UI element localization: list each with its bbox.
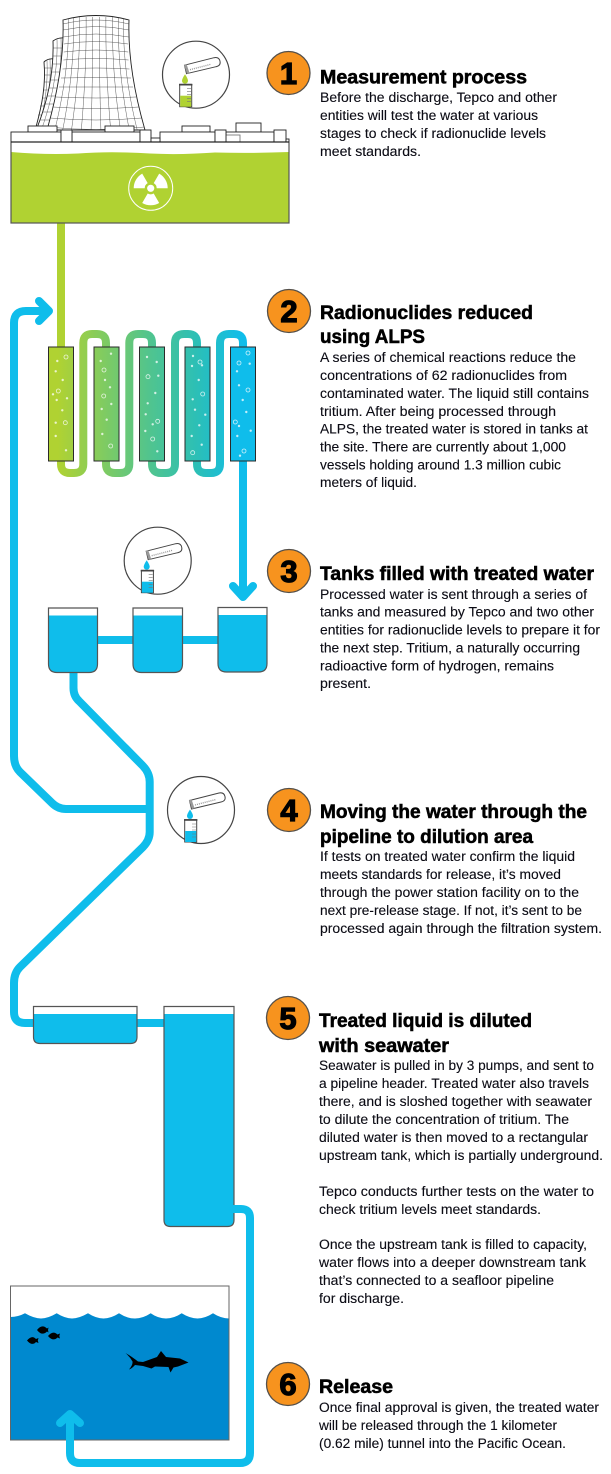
icon: fish school: [27, 1326, 60, 1344]
body text: [320, 849, 602, 937]
number badge 3: 3: [280, 554, 298, 589]
heading: Radionuclides reduced: [320, 302, 533, 324]
heading: using ALPS: [320, 326, 425, 348]
body text: Before the discharge, Tepco and other: [320, 90, 557, 106]
icon: shark: [126, 1351, 188, 1372]
body text: ALPS, the treated water is stored in tanks at: [320, 422, 588, 438]
column 5: [230, 347, 256, 461]
body text: [318, 1400, 599, 1452]
body text: A series of chemical reactions reduce the: [320, 350, 576, 366]
heading: Moving the water through the: [320, 801, 587, 823]
number badge 3: [268, 550, 310, 592]
body text: present.: [320, 676, 371, 692]
body text: Seawater is pulled in by 3 pumps, and sent to: [319, 1058, 594, 1074]
icon: test tube measurement blue (pipeline): [168, 776, 234, 844]
icon: radiation symbol: [129, 166, 173, 210]
cooling towers: [36, 16, 145, 130]
heading: [320, 801, 587, 848]
body text: Tepco conducts further tests on the water to: [319, 1184, 594, 1200]
water storage base with contaminated water: [11, 142, 289, 223]
step 6: release: [266, 1362, 599, 1452]
body text: to dilute the concentration of tritium. The: [319, 1112, 569, 1128]
body text: radioactive form of hydrogen, remains: [320, 658, 554, 674]
number badge 4: [268, 788, 310, 832]
body text: through the power station facility on to the: [320, 885, 579, 901]
body text: diluted water is then moved to a rectangular: [319, 1130, 588, 1146]
heading: Treated liquid is diluted: [319, 1010, 532, 1032]
body text: vessels holding around 1.3 million cubic: [320, 458, 561, 474]
heading: Tanks filled with treated water: [320, 563, 594, 585]
column 4: [185, 347, 210, 461]
body text: (0.62 mile) tunnel into the Pacific Ocean.: [319, 1436, 566, 1452]
body text: Once the upstream tank is filled to capacity,: [319, 1237, 587, 1253]
step 2: radionuclides reduced: [268, 290, 589, 491]
number badge 2: 2: [280, 294, 298, 329]
pipe from tank to test junction: [14, 670, 150, 1023]
body text: tanks and measured by Tepco and two other: [320, 604, 594, 620]
body text: Once final approval is given, the treated water: [319, 1400, 599, 1416]
body text: contaminated water. The liquid still contains: [320, 386, 589, 402]
icon: test tube measurement green: [162, 41, 230, 108]
body text: entities for radionuclide levels to prepare it for: [320, 622, 600, 638]
number badge 6: [266, 1362, 310, 1406]
step 3: tanks filled: [268, 550, 600, 692]
body text: processed again through the filtration system.: [320, 921, 602, 937]
body text: the next step. Tritium, a naturally occurring: [320, 640, 580, 656]
arrow from ALPS to tanks: [233, 460, 253, 597]
step 4: moving the water: [268, 788, 602, 937]
number badge 1: 1: [280, 56, 297, 91]
body text: meters of liquid.: [320, 475, 417, 491]
column 1: [48, 347, 74, 461]
body text: meets standards for release, it’s moved: [320, 867, 561, 883]
number badge 4: 4: [280, 793, 298, 828]
body text: that’s connected to a seafloor pipeline: [319, 1273, 554, 1289]
number badge 1: [267, 52, 310, 94]
connector pipe: [136, 1019, 165, 1027]
body text: If tests on treated water confirm the liquid: [320, 849, 575, 865]
pipe from upstream tank to ocean with arrow: [60, 1209, 250, 1463]
tank A: [48, 608, 98, 672]
ALPS serpentine pipes: [61, 334, 243, 473]
body text: [318, 1058, 603, 1307]
body text: tritium. After being processed through: [320, 404, 556, 420]
body text: water flows into a deeper downstream tank: [318, 1255, 587, 1271]
body text: upstream tank, which is partially underground.: [319, 1148, 603, 1164]
step 1: measurement process: [267, 52, 557, 160]
stage 3 tanks: [48, 608, 267, 672]
tank B: [133, 608, 182, 672]
body text: stages to check if radionuclide levels: [320, 126, 546, 142]
number badge 5: [266, 996, 310, 1040]
body text: [320, 350, 589, 491]
heading: [320, 302, 533, 348]
body text: entities will test the water at various: [320, 108, 538, 124]
power plant buildings: [11, 123, 289, 142]
body text: check tritium levels meet standards.: [319, 1202, 541, 1218]
number badge 6: 6: [279, 1367, 297, 1402]
icon: test tube measurement blue (tanks): [124, 527, 191, 594]
heading: Measurement process: [320, 66, 527, 88]
heading: Release: [319, 1376, 393, 1398]
body text: there, and is sloshed together with seawater: [319, 1094, 592, 1110]
step 5: treated liquid diluted: [266, 996, 603, 1307]
body text: concentrations of 62 radionuclides from: [320, 368, 567, 384]
front cooling tower: [47, 16, 145, 130]
column 3: [140, 347, 164, 461]
heading: pipeline to dilution area: [320, 826, 533, 848]
upstream tank: [164, 1006, 234, 1226]
body text: Processed water is sent through a series of: [320, 587, 587, 603]
number badge 5: 5: [279, 1001, 297, 1036]
header tank: [34, 1006, 137, 1044]
dilution tanks: [34, 1006, 234, 1226]
recycle pipe with arrow back to ALPS: [14, 301, 150, 809]
body text: the site. There are currently about 1,000: [320, 440, 566, 456]
body text: meet standards.: [320, 144, 421, 160]
body text: will be released through the 1 kilometer: [318, 1418, 557, 1434]
body text: a pipeline header. Treated water also travels: [319, 1076, 589, 1092]
body text: [320, 587, 600, 692]
body text: for discharge.: [319, 1291, 404, 1307]
green pipe from plant to ALPS: [57, 222, 65, 348]
body text: next pre-release stage. If not, it’s sent to be: [320, 903, 582, 919]
body text: [320, 90, 557, 160]
tank C: [218, 608, 267, 672]
heading: [318, 1010, 532, 1057]
heading: with seawater: [318, 1035, 449, 1057]
back cooling tower: [36, 59, 54, 127]
column 2: [94, 347, 119, 461]
ALPS filter columns: [48, 347, 256, 461]
number badge 2: [268, 290, 310, 332]
tank connector pipes: [97, 636, 218, 644]
ocean: [10, 1286, 229, 1440]
middle cooling tower: [37, 38, 66, 128]
